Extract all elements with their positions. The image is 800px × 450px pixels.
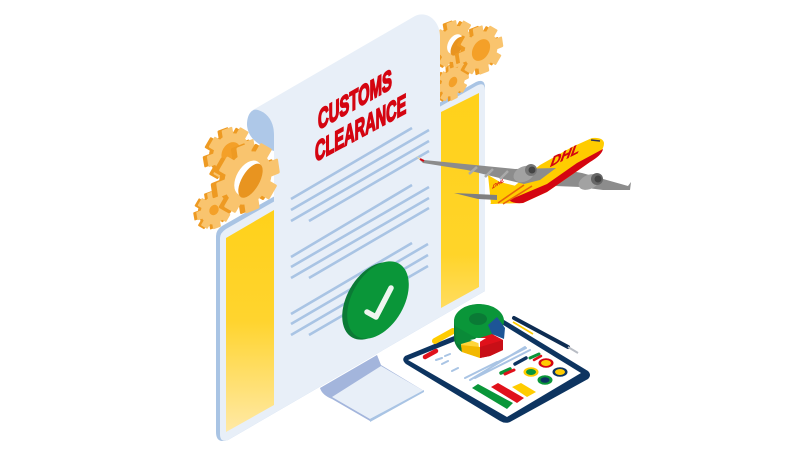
clipboard <box>403 318 590 423</box>
small text lines <box>436 347 530 380</box>
far wing <box>555 170 631 190</box>
near engine <box>511 163 537 185</box>
yellow segment <box>461 339 480 358</box>
check badge <box>329 251 422 350</box>
gears top right <box>421 11 512 108</box>
rear stripes <box>498 185 532 204</box>
cockpit <box>591 140 600 141</box>
fuselage <box>490 138 604 204</box>
red belly <box>509 149 603 203</box>
gears left <box>187 117 292 237</box>
small legend marks <box>501 354 541 374</box>
3D pie chart <box>454 304 505 358</box>
blue segment <box>488 317 505 339</box>
clip <box>435 331 453 341</box>
red pill <box>425 351 436 357</box>
ring charts <box>524 358 568 385</box>
far engine <box>576 171 603 193</box>
monitor stand <box>320 355 424 422</box>
title: CLEARANCE <box>315 87 406 168</box>
check mark <box>367 288 391 317</box>
document paper <box>247 14 440 405</box>
red segment <box>480 334 503 358</box>
right yellow screen panel <box>441 93 479 308</box>
paper curl <box>247 110 274 151</box>
bars <box>472 383 536 409</box>
airplane <box>416 138 631 204</box>
title: CUSTOMS <box>318 63 392 136</box>
tail fin <box>488 175 516 204</box>
monitor <box>216 81 485 441</box>
text lines <box>291 128 429 335</box>
left yellow screen panel <box>226 210 274 432</box>
pen <box>513 318 578 353</box>
tail DHL text: DHL <box>492 177 505 191</box>
stabilizer <box>454 193 497 200</box>
flap fairings <box>469 167 508 179</box>
DHL livery text: DHL <box>549 140 581 171</box>
near wing <box>418 158 556 184</box>
